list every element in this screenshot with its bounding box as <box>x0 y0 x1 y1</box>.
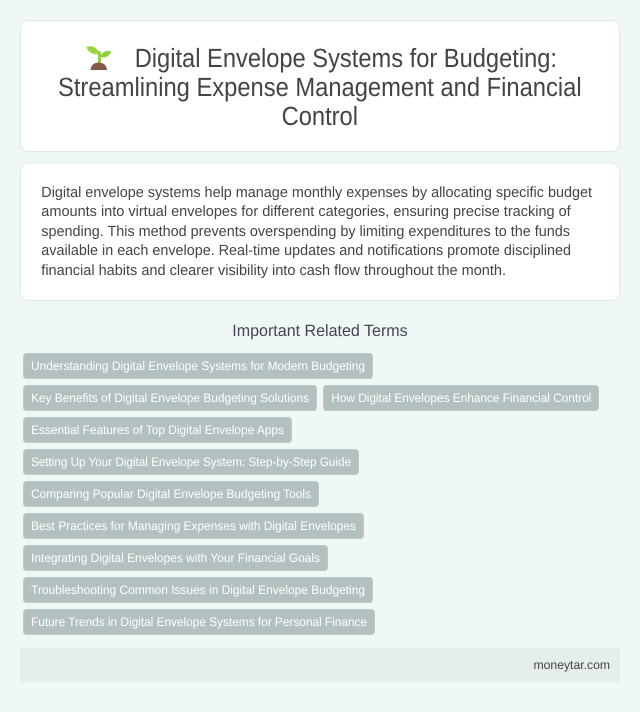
tag 3: How Digital Envelopes Enhance Financial Control <box>331 391 591 405</box>
tag 10 <box>24 610 374 634</box>
related term tags <box>24 354 598 634</box>
tag 4 <box>24 418 292 442</box>
tag 1 <box>24 354 372 378</box>
tag 4: Essential Features of Top Digital Envelope Apps <box>31 423 284 437</box>
title: Digital Envelope Systems for Budgeting: <box>135 43 557 73</box>
footer source text: moneytar.com <box>534 658 610 672</box>
title <box>58 43 582 131</box>
tag 9: Troubleshooting Common Issues in Digital Envelope Budgeting <box>31 583 365 597</box>
panel: title card <box>20 20 620 152</box>
tag 2 <box>24 386 316 410</box>
panel: description <box>20 163 620 300</box>
description text: spending. This method prevents overspending by limiting expenditures to the funds <box>41 224 570 240</box>
title: Streamlining Expense Management and Financial <box>58 72 582 102</box>
tag 8: Integrating Digital Envelopes with Your Financial Goals <box>31 551 320 565</box>
tag 5 <box>24 450 358 474</box>
tag 5: Setting Up Your Digital Envelope System: Step-by-Step Guide <box>31 455 351 469</box>
description text <box>41 185 592 279</box>
tag 6: Comparing Popular Digital Envelope Budgeting Tools <box>31 487 311 501</box>
tag 9 <box>24 578 372 602</box>
tag 3 <box>324 386 598 410</box>
description text: Digital envelope systems help manage monthly expenses by allocating specific budget <box>41 185 592 201</box>
tag 6 <box>24 482 318 506</box>
heading: related terms: Important Related Terms <box>232 322 408 340</box>
title: Control <box>282 101 358 131</box>
description text: available in each envelope. Real-time updates and notifications promote disciplined <box>41 243 571 259</box>
description text: amounts into virtual envelopes for different categories, ensuring precise tracking of <box>41 204 572 220</box>
footer bar <box>20 648 620 682</box>
description text: financial habits and clearer visibility into cash flow throughout the month. <box>41 263 506 279</box>
tag 1: Understanding Digital Envelope Systems for Modern Budgeting <box>31 359 365 373</box>
tag 7 <box>24 514 364 538</box>
tag 10: Future Trends in Digital Envelope Systems for Personal Finance <box>31 615 367 629</box>
icon: seedling <box>86 46 111 70</box>
tag 2: Key Benefits of Digital Envelope Budgeting Solutions <box>31 391 309 405</box>
tag 7: Best Practices for Managing Expenses with Digital Envelopes <box>31 519 356 533</box>
tag 8 <box>24 546 328 570</box>
